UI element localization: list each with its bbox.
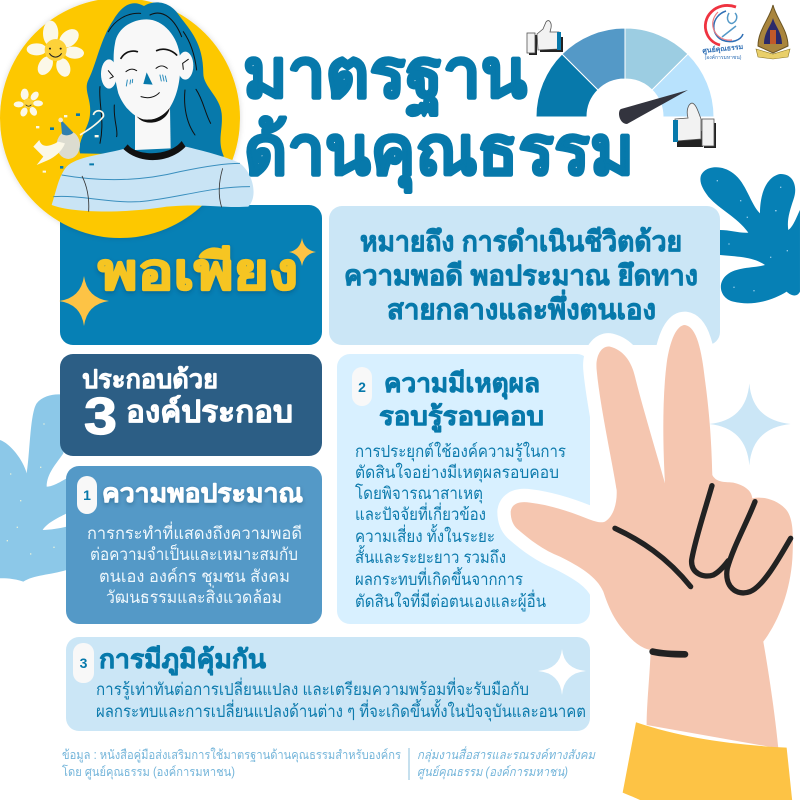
gauge meter xyxy=(536,28,714,124)
decorative blob: top right xyxy=(700,167,800,303)
panel: definition xyxy=(329,206,720,345)
panel: component 3 immunity xyxy=(66,637,590,731)
source credit xyxy=(62,748,401,780)
description text xyxy=(355,441,566,612)
flower: small xyxy=(14,89,43,118)
decorative sparkle: right of hand xyxy=(709,383,791,465)
title xyxy=(243,36,634,193)
heading การมีภูมิคุ้มกัน: การมีภูมิคุ้มกัน xyxy=(99,644,266,676)
party bird xyxy=(33,111,104,173)
description text: ความเสี่ยง ทั้งในระยะ xyxy=(355,524,495,546)
number badge 3 xyxy=(73,643,94,683)
flower: large xyxy=(27,21,84,79)
description text: ตัดสินใจอย่างมีเหตุผลรอบคอบ xyxy=(355,462,559,483)
panel: sufficiency keyword xyxy=(59,205,322,345)
icon: thumbs up small xyxy=(527,21,563,55)
description text: การประยุกต์ใช้องค์ความรู้ในการ xyxy=(355,441,566,462)
title line 2: ด้านคุณธรรม xyxy=(244,113,634,193)
panel: three components heading xyxy=(60,354,322,456)
heading ความมีเหตุผล รอบรู้รอบคอบ: รอบรู้รอบคอบ xyxy=(379,401,544,433)
sparkle: white xyxy=(538,649,586,695)
number badge 1: 1 xyxy=(83,487,91,503)
hand skin xyxy=(511,325,793,748)
logo: moral center: ศูนย์คุณธรรม xyxy=(702,42,744,56)
description text: และปัจจัยที่เกี่ยวข้อง xyxy=(355,502,486,524)
striped shirt xyxy=(52,147,254,211)
neck and face xyxy=(135,107,171,150)
icon: thumbs up large xyxy=(673,103,716,148)
number badge 2 xyxy=(352,367,372,406)
label องค์ประกอบ: องค์ประกอบ xyxy=(126,395,293,429)
description text: ตนเอง องค์กร ชุมชน สังคม xyxy=(99,567,290,587)
logo: moral center xyxy=(702,5,744,61)
heading ความมีเหตุผล รอบรู้รอบคอบ: ความมีเหตุผล xyxy=(384,368,540,400)
sparkle: large xyxy=(59,276,109,326)
logo: temple crest xyxy=(756,5,790,59)
source line 1: ข้อมูล : หนังสือคู่มือส่งเสริมการใช้มาตรฐานด้านคุณธรรมสำหรับองค์กร xyxy=(62,748,401,763)
description text: ต่อความจำเป็นและเหมาะสมกับ xyxy=(90,543,298,564)
panel: component 2 reasonableness xyxy=(337,354,590,624)
description text: การรู้เท่าทันต่อการเปลี่ยนแปลง และเตรียมความพร้อมที่จะรับมือกับ xyxy=(96,677,529,700)
heading ความพอประมาณ: ความพอประมาณ xyxy=(102,478,303,508)
description text: การกระทำที่แสดงถึงความพอดี xyxy=(87,521,302,543)
keyword พอเพียง: พอเพียง xyxy=(98,244,298,300)
gauge needle xyxy=(619,90,688,124)
hand showing three fingers xyxy=(511,325,793,800)
number badge 1 xyxy=(77,476,97,514)
label ประกอบด้วย: ประกอบด้วย xyxy=(82,364,218,394)
sparkle: small xyxy=(289,238,316,266)
description text: ผลกระทบและการเปลี่ยนแปลงด้านต่าง ๆ ที่จะเกิดขึ้นทั้งในปัจจุบันและอนาคต xyxy=(96,699,586,722)
description text: สั้นและระยะยาว รวมถึง xyxy=(355,545,506,567)
decorative blob: left xyxy=(0,394,67,582)
number badge 3: 3 xyxy=(80,655,88,671)
definition text: หมายถึง การดำเนินชีวิตด้วย xyxy=(360,226,682,257)
heading ความมีเหตุผล รอบรู้รอบคอบ xyxy=(379,368,544,433)
description text: ผลกระทบที่เกิดขึ้นจากการ xyxy=(355,567,523,589)
yellow circle xyxy=(0,0,240,238)
definition text: สายกลางและพึ่งตนเอง xyxy=(387,289,656,325)
author line 2: ศูนย์คุณธรรม (องค์การมหาชน) xyxy=(417,765,568,780)
source line 2: โดย ศูนย์คุณธรรม (องค์การมหาชน) xyxy=(62,764,235,780)
hair xyxy=(79,2,224,157)
description text: วัฒนธรรมและสิ่งแวดล้อม xyxy=(106,585,282,607)
author credit xyxy=(417,746,596,780)
description text xyxy=(87,521,302,607)
description text xyxy=(96,677,586,722)
logo: moral center: (องค์การมหาชน) xyxy=(705,54,742,61)
panel: component 1 moderation xyxy=(66,466,322,624)
character illustration on yellow circle xyxy=(0,0,254,238)
big number 3: 3 xyxy=(84,388,117,446)
author line 1: กลุ่มงานสื่อสารและรณรงค์ทางสังคม xyxy=(417,746,596,763)
definition text: ความพอดี พอประมาณ ยึดทาง xyxy=(344,260,698,291)
yellow sleeve xyxy=(623,722,792,800)
title line 1: มาตรฐาน xyxy=(243,36,527,118)
number badge 2: 2 xyxy=(358,379,366,395)
definition text xyxy=(344,226,698,325)
description text: โดยพิจารณาสาเหตุ xyxy=(355,483,483,504)
description text: ตัดสินใจที่มีต่อตนเองและผู้อื่น xyxy=(355,589,546,612)
black collar xyxy=(123,141,186,162)
